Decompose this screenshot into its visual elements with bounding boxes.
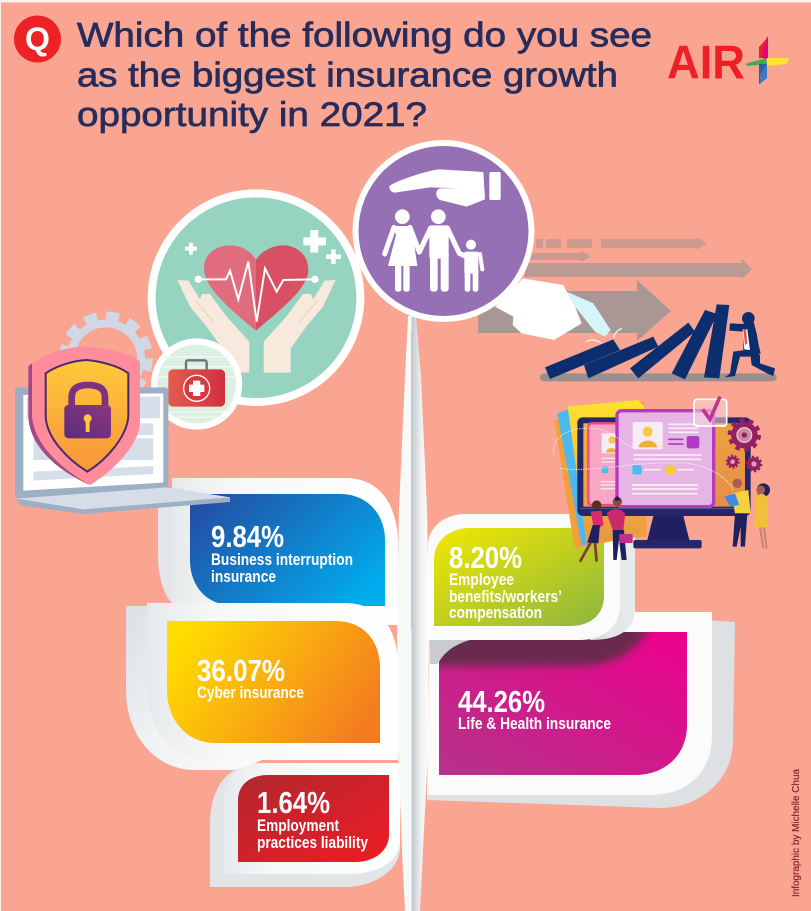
panel: employee benefits: 8.20% (449, 540, 522, 575)
logo: AIR+: AIR (667, 36, 745, 88)
panel: life and health card frame (427, 612, 712, 795)
icon: family protected by hand (352, 140, 534, 322)
panel: employment practices liability: practices liability (257, 834, 369, 852)
panel: cyber card frame (147, 603, 398, 760)
icon: Q badge (14, 16, 61, 62)
panel: employee benefits: Employee (449, 571, 514, 589)
panel: business interruption: insurance (211, 568, 276, 586)
icon: health circle (148, 189, 364, 406)
illustration: man and woman, right (724, 479, 770, 548)
icon: woman (385, 209, 419, 292)
panel: business interruption: Business interruption (211, 551, 353, 569)
credit: Infographic by Michelle Chua (790, 769, 802, 897)
panel: employee benefits (434, 528, 604, 626)
logo: AIR+ (667, 36, 789, 88)
icon: cupped hands (177, 280, 336, 373)
title: opportunity in 2021? (77, 96, 427, 134)
icon: heart (195, 245, 319, 331)
icon: child (464, 240, 482, 292)
panel: employment practices liability (238, 775, 389, 862)
panel: employment practices liability: Employment (257, 817, 339, 835)
panel: employee benefits: benefits/workers’ (449, 588, 562, 606)
icon: sheltering hand (389, 169, 501, 207)
icon: gears (727, 420, 761, 471)
panel: business interruption: 9.84% (211, 519, 284, 554)
title: as the biggest insurance growth (77, 56, 618, 94)
icon: monitor with staff profiles (553, 397, 770, 562)
icon: pointing hand and dominoes (495, 278, 777, 381)
panel: blue card back (158, 492, 176, 606)
panel: cyber insurance: Cyber insurance (197, 684, 304, 702)
panel: decorative arrows (478, 237, 752, 341)
icon: first aid circle (151, 338, 242, 430)
title: Which of the following do you see (77, 16, 652, 54)
panel: employment card back (210, 767, 400, 887)
icon: gear (64, 316, 148, 401)
panel: cyber card back (126, 606, 262, 770)
icon: Q badge: Q (25, 21, 50, 57)
panel: business interruption (190, 494, 385, 606)
panel: life and health card back (427, 620, 735, 808)
panel: cyber insurance (167, 621, 380, 743)
panel: life and health insurance: Life & Health insurance (458, 715, 611, 733)
panel: employment practices liability: 1.64% (257, 785, 330, 820)
icon: plus signs (185, 230, 341, 264)
panel: blue card frame (172, 478, 398, 625)
panel: employee benefits: compensation (449, 604, 542, 622)
panel: life and health insurance: 44.26% (458, 684, 545, 719)
panel: employee card frame (428, 514, 620, 640)
illustration: woman and man, left (580, 496, 633, 562)
icon: shield with padlock (28, 347, 140, 485)
panel: employee card back (590, 514, 635, 640)
icon: man (419, 209, 465, 292)
title (77, 16, 652, 134)
icon: laptop (15, 387, 230, 514)
panel: employment card frame (223, 763, 400, 874)
panel: life and health insurance (430, 625, 687, 775)
central spine (397, 316, 429, 911)
panel: cyber insurance: 36.07% (197, 653, 285, 688)
